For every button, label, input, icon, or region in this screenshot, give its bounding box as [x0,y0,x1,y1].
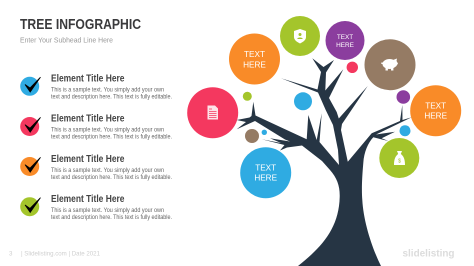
item 1 text: text and description here. This text is fully editable. [51,94,172,100]
circle: purple text [326,21,364,60]
circle: orange text right [410,85,461,136]
tree [237,58,412,266]
circle: orange text: TEXT [244,50,265,59]
list item 4 [20,194,172,221]
item 3 text: text and description here. This text is fully editable. [51,174,172,181]
icon: green check [20,197,40,216]
circle: orange text [229,34,280,84]
list item 3 [20,154,172,181]
item 1 text [51,74,172,100]
icon: blue check [20,77,40,96]
item 2 text: text and description here. This text is fully editable. [51,134,172,141]
item 3 text [51,154,172,181]
dot: green [243,92,252,101]
icon: orange check [20,157,40,176]
item 4 text: Element Title Here [51,194,125,205]
circle: blue text [240,147,291,198]
item 4 text: This is a sample text. You simply add your own [51,207,164,214]
list item 2 [20,114,172,141]
dot: purple [396,90,410,104]
icon: money bag: $ [398,158,401,164]
dot: blue right [400,125,410,136]
item 4 text: text and description here. This text is fully editable. [51,214,172,221]
item 1 text: Element Title Here [51,74,125,84]
item 4 text [51,194,172,221]
item 2 text: This is a sample text. You simply add your own [51,126,164,134]
item 1 text: This is a sample text. You simply add your own [51,86,164,94]
icon: shield [294,29,306,44]
subhead: Enter Your Subhead Line Here [20,36,113,45]
circle: orange text: HERE [243,61,266,70]
circle: orange text right: HERE [424,112,448,120]
circle: blue text: TEXT [255,163,276,172]
circle: purple text: TEXT [337,34,353,41]
list item 1 [20,74,172,100]
item 3 text: This is a sample text. You simply add your own [51,167,164,174]
item 2 text: Element Title Here [51,114,125,125]
circle: brown piggy bank [364,39,416,90]
dot: red [347,62,358,73]
circle: orange text right: TEXT [425,101,446,110]
title: TREE INFOGRAPHIC [20,17,141,33]
icon: red check [20,117,40,136]
item 2 text [51,114,172,141]
footer: | Slidelisting.com | Date 2021 [21,250,101,257]
circle: blue text: HERE [254,174,278,183]
circle: pink document [187,87,238,138]
footer: 3 [9,250,13,257]
dot: brown [245,129,259,143]
circle: green money bag [379,138,419,178]
circle: purple text: HERE [336,42,354,49]
icon: piggy bank [381,58,398,70]
circle: green shield [280,16,320,56]
item 3 text: Element Title Here [51,154,125,165]
dot: blue tiny [262,130,267,135]
dot: blue large [294,92,312,110]
icon: document [208,106,218,120]
watermark: slidelisting [402,248,454,260]
